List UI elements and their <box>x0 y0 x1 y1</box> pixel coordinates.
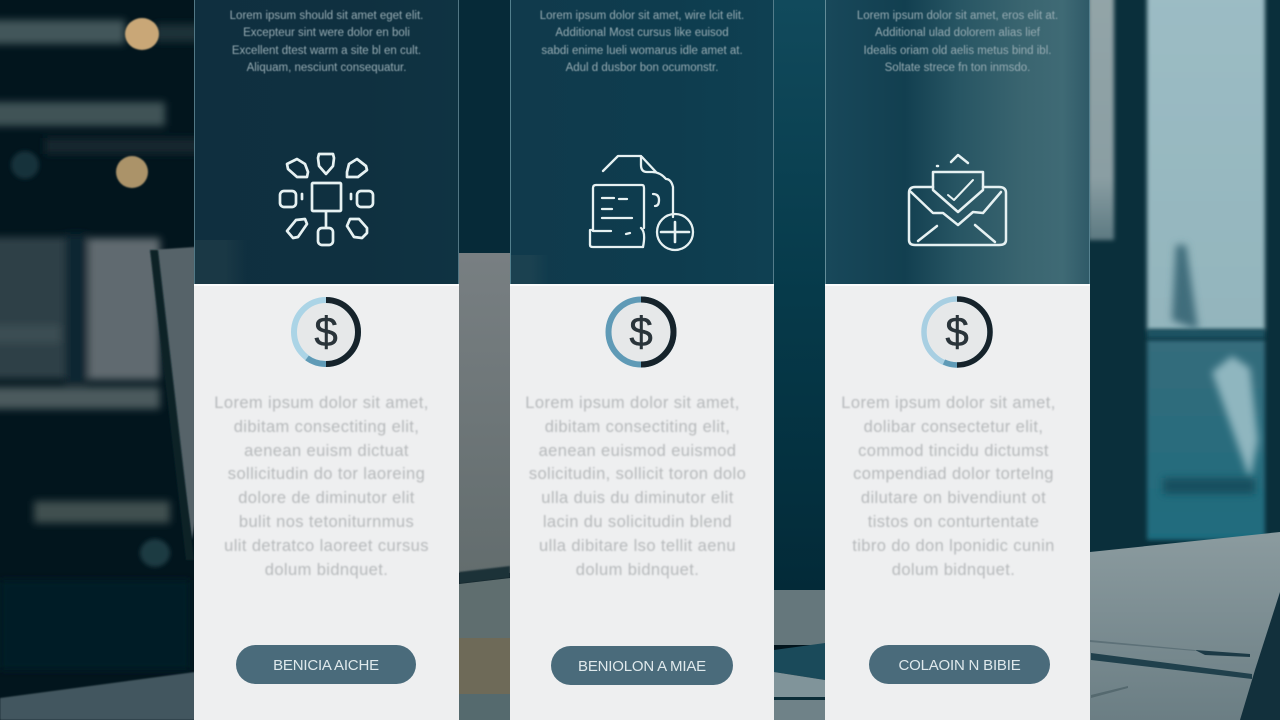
icon: network of nodes <box>278 152 374 246</box>
card 2 body text: lacin du solicitudin blend <box>543 513 732 531</box>
panel: card 3 <box>825 0 1090 720</box>
card 1 header text: Excepteur sint were dolor en boli <box>243 27 410 39</box>
card 3 header text: Lorem ipsum dolor sit amet, eros elit at. <box>857 10 1058 22</box>
card 1 body text: aenean euism dictuat <box>244 442 409 460</box>
card 1 header <box>194 0 459 284</box>
icon: envelope with check <box>908 154 1008 246</box>
panel: card 1 <box>194 0 459 720</box>
card 3 header text: Soltate strece fn ton inmsdo. <box>885 62 1030 74</box>
card 1 header text <box>230 10 423 74</box>
card 2 header text <box>540 10 744 74</box>
card 2 header text: Additional Most cursus like euisod <box>555 27 729 39</box>
card 1 body text: bulit nos tetoniturnmus <box>239 513 414 531</box>
card 2 header <box>510 0 774 284</box>
card 2 body text: dolum bidnquet. <box>576 561 699 579</box>
card 1 button: BENICIA AICHE <box>273 657 379 674</box>
card 2 body text: ulla duis du diminutor elit <box>541 489 734 507</box>
card 3 header <box>825 0 1090 284</box>
card 3 body text: compendiad dolor tortelng <box>853 465 1054 483</box>
card 1 body text: dibitam consectiting elit, <box>234 418 419 436</box>
card 2 body text: dibitam consectiting elit, <box>545 418 730 436</box>
card 2 button <box>551 646 733 685</box>
card 1 body text: Lorem ipsum dolor sit amet, <box>214 394 429 412</box>
card 3 price badge: $ <box>945 308 969 355</box>
panel: card 2 <box>510 0 774 720</box>
card 1 body text <box>214 394 429 579</box>
card 1 header text: Aliquam, nesciunt consequatur. <box>247 62 406 74</box>
card 1 body text: dolum bidnquet. <box>265 561 388 579</box>
card 2 body text: ulla dibitare lso tellit aenu <box>539 537 736 555</box>
card 3 button: COLAOIN N BIBIE <box>898 657 1021 674</box>
card 3 header text: Additional ulad dolorem alias lief <box>875 27 1040 39</box>
card 2 header text: Lorem ipsum dolor sit amet, wire lcit elit. <box>540 10 744 22</box>
card 3 body <box>825 284 1090 720</box>
card 3 body text: Lorem ipsum dolor sit amet, <box>841 394 1056 412</box>
card 3 body text: commod tincidu dictumst <box>858 442 1049 460</box>
card 2 body text: aenean euismod euismod <box>539 442 736 460</box>
card 3 header text: Idealis oriam old aelis metus bind ibl. <box>864 45 1051 57</box>
card 2 header text: sabdi enime lueli womarus idle amet at. <box>541 45 743 57</box>
card 1 header text: Excellent dtest warm a site bl en cult. <box>232 45 421 57</box>
card 3 body text <box>841 394 1056 579</box>
card 2 button: BENIOLON A MIAE <box>578 658 706 675</box>
card 3 body text: tistos on conturtentate <box>868 513 1039 531</box>
card 1 button <box>236 645 416 684</box>
card 1 price badge: $ <box>314 308 338 355</box>
card 2 price badge: $ <box>629 308 653 355</box>
card 1 body text: ulit detratco laoreet cursus <box>224 537 429 555</box>
card 2 body text: Lorem ipsum dolor sit amet, <box>525 394 740 412</box>
card 3 button <box>869 645 1050 684</box>
card 3 header text <box>857 10 1058 74</box>
card 3 body text: dilutare on bivendiunt ot <box>861 489 1046 507</box>
card 2 body text: solicitudin, sollicit toron dolo <box>529 465 746 483</box>
card 3 body text: dolibar consectetur elit, <box>864 418 1043 436</box>
icon: documents with plus <box>588 154 694 252</box>
card 1 body text: sollicitudin do tor laoreing <box>228 465 425 483</box>
card 1 body <box>194 284 459 720</box>
card 2 body <box>510 284 774 720</box>
card 2 header text: Adul d dusbor bon ocumonstr. <box>566 62 718 74</box>
card 1 header text: Lorem ipsum should sit amet eget elit. <box>230 10 423 22</box>
card 2 body text <box>525 394 746 579</box>
card 3 body text: tibro do don lponidic cunin <box>852 537 1055 555</box>
card 1 body text: dolore de diminutor elit <box>238 489 415 507</box>
card 3 body text: dolum bidnquet. <box>892 561 1015 579</box>
